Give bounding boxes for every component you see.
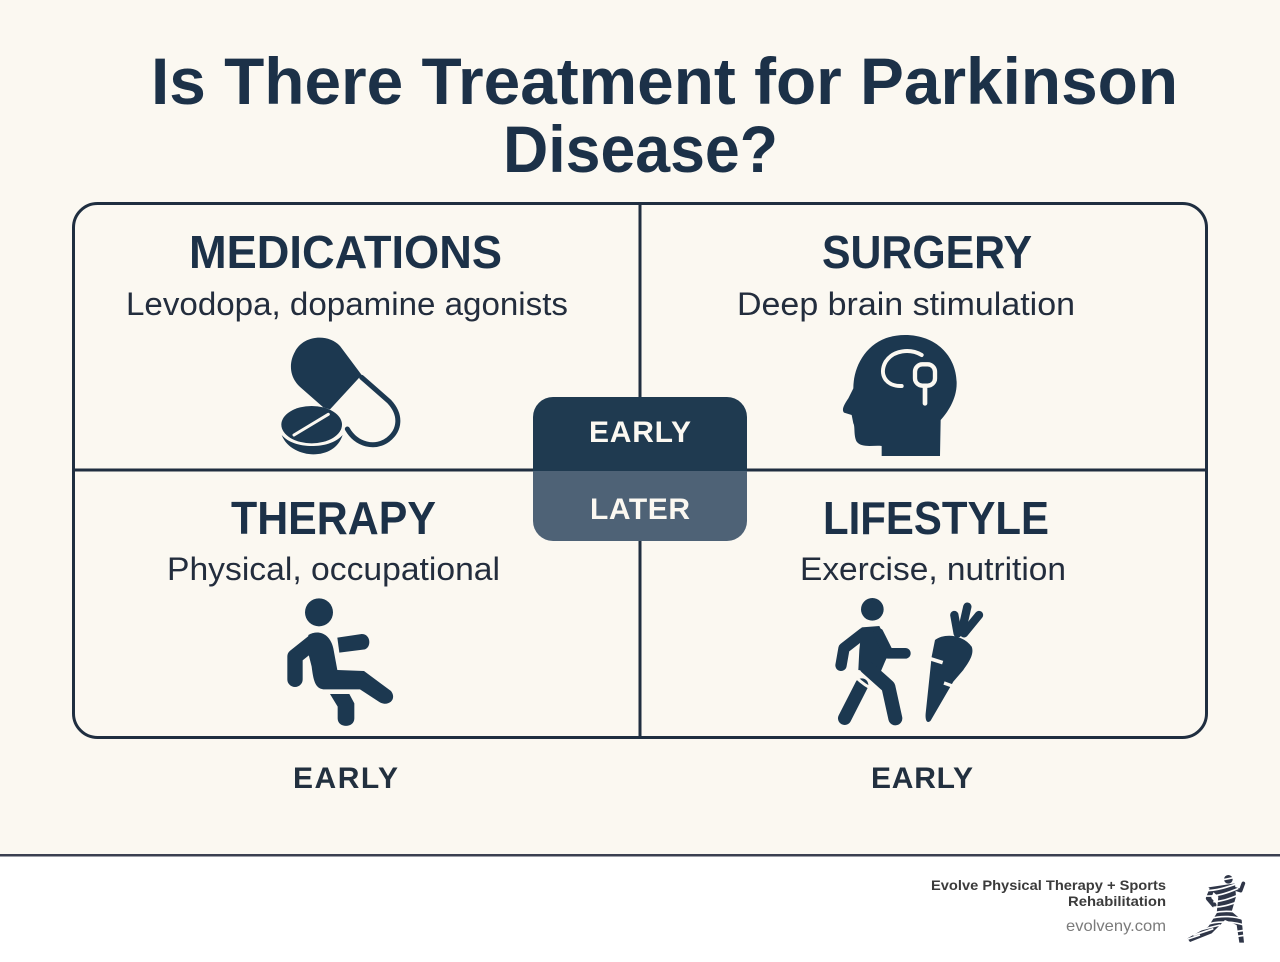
icon: walking person and carrot [841,598,979,722]
icon: head with brain stimulator [843,335,957,456]
center timeline badge [533,397,747,541]
text: medications detail: Levodopa, dopamine agonists [126,286,568,322]
panel: therapy [167,492,500,726]
text: therapy detail: Physical, occupational [167,551,500,587]
quadrant grid frame [74,204,1206,738]
panel: medications [126,226,568,454]
label: early: EARLY [589,416,691,449]
title: Is There Treatment for Parkinson [151,44,1178,118]
footer company name: Rehabilitation [1068,893,1166,909]
heading: medications: MEDICATIONS [189,226,502,278]
icon: capsule and pill [281,338,398,454]
title: Disease? [503,112,778,186]
panel: lifestyle [800,492,1066,722]
label: left column early: EARLY [293,762,398,795]
footer company name [931,877,1166,909]
footer company name: Evolve Physical Therapy + Sports [931,877,1166,893]
logo: striped runner [1185,875,1247,943]
heading: therapy: THERAPY [231,492,436,544]
heading: lifestyle: LIFESTYLE [823,492,1049,544]
heading: surgery: SURGERY [822,226,1032,278]
footer url: evolveny.com [1066,918,1166,935]
label: later: LATER [590,493,690,526]
text: surgery detail: Deep brain stimulation [737,286,1075,322]
footer [0,854,1280,962]
icon: person exercising [295,598,393,726]
panel: surgery [737,226,1075,456]
title [151,44,1178,186]
label: right column early: EARLY [871,762,973,795]
text: lifestyle detail: Exercise, nutrition [800,551,1066,587]
